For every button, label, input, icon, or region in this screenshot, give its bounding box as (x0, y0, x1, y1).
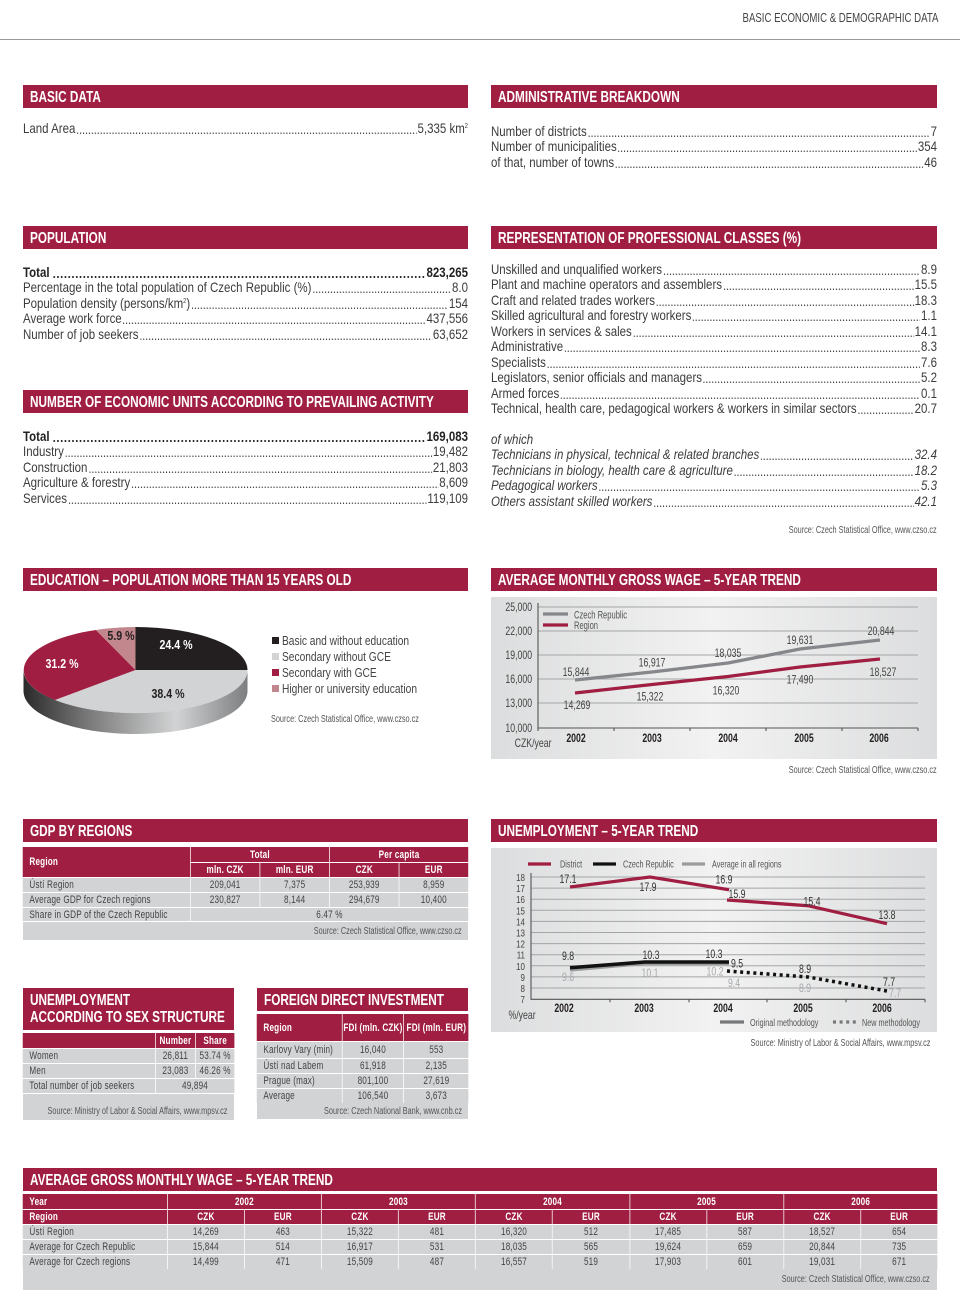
line chart: unemployment trend: 9.4 (728, 978, 740, 990)
line chart: unemployment trend: 9.6 (562, 972, 574, 984)
pie chart: education: 5.9 % (107, 629, 135, 643)
heading: basic data: BASIC DATA (30, 89, 100, 106)
text block: professional classes: Specialists (491, 354, 546, 370)
table: gdp by regions: 8,959 (423, 879, 444, 891)
line chart: wage trend: 14,269 (564, 700, 591, 712)
heading: education (23, 568, 468, 591)
text block: population: Total (23, 264, 50, 280)
line chart: wage trend: Czech Republic (574, 609, 627, 622)
line chart: unemployment trend: 17 (516, 883, 525, 894)
source: gdp by regions: Source: Czech Statistical Office, www.czso.cz (314, 926, 462, 937)
line chart: unemployment trend: Original methodology (750, 1017, 819, 1028)
table: foreign direct investment: Ústí nad Labem (263, 1060, 323, 1072)
table: unemployment by sex: Women (29, 1050, 58, 1062)
table: gross monthly wage: 671 (892, 1256, 906, 1268)
line chart: unemployment trend: 2003 (634, 1003, 654, 1015)
table: gross monthly wage: EUR (890, 1211, 908, 1223)
table: gross monthly wage: CZK (659, 1211, 677, 1223)
table: gross monthly wage: 16,320 (501, 1226, 527, 1238)
text block: professional classes: 8.9 (921, 261, 937, 277)
heading: gross monthly wage (23, 1168, 937, 1191)
source: wage trend: Source: Czech Statistical Office, www.czso.cz (789, 765, 937, 776)
heading: professional classes: REPRESENTATION OF PROFESSIONAL CLASSES (%) (498, 230, 801, 247)
line chart: unemployment trend: 7 (521, 994, 525, 1005)
table: unemployment by sex: Total number of job seekers (29, 1080, 134, 1092)
table: unemployment by sex: 26,811 (163, 1050, 188, 1062)
line chart: wage trend: 13,000 (505, 698, 532, 710)
text block: administrative breakdown (491, 123, 937, 170)
text block: of which: 42.1 (915, 493, 937, 509)
line chart: unemployment trend: 2004 (713, 1003, 733, 1015)
text block: population: 63,652 (433, 326, 468, 342)
line chart: wage trend: 16,000 (505, 674, 532, 686)
table: gross monthly wage: Average for Czech regions (29, 1256, 130, 1268)
heading: gdp by regions: GDP BY REGIONS (30, 823, 132, 840)
table: foreign direct investment: 2,135 (426, 1060, 447, 1072)
line chart: unemployment trend: 10.2 (707, 966, 724, 979)
table: gdp by regions: 7,375 (284, 879, 305, 891)
text block: of which: 5.3 (921, 477, 937, 493)
table: foreign direct investment: FDI (mln. CZK) (343, 1022, 403, 1034)
text block: administrative breakdown: Number of municipalities (491, 138, 617, 154)
table: gross monthly wage: 16,917 (347, 1241, 373, 1253)
text block: professional classes: 8.3 (921, 338, 937, 354)
table: gross monthly wage: 587 (738, 1226, 752, 1238)
table: gross monthly wage: 487 (430, 1256, 444, 1268)
table: foreign direct investment: Karlovy Vary (min) (263, 1044, 333, 1056)
table: foreign direct investment (256, 1014, 468, 1103)
legend: education: Secondary without GCE (282, 649, 391, 664)
heading: unemployment trend: UNEMPLOYMENT – 5-YEAR TREND (498, 823, 698, 840)
text block: population: 8.0 (452, 279, 468, 295)
text block: professional classes: Armed forces (491, 385, 559, 401)
text block: professional classes: 0.1 (921, 385, 937, 401)
text block: population: Percentage in the total population of Czech Republic (%) (23, 279, 311, 295)
table: foreign direct investment: 3,673 (426, 1090, 447, 1102)
line chart: unemployment trend: 10.1 (642, 968, 659, 980)
line chart: wage trend: 2005 (794, 733, 814, 745)
table: gross monthly wage: 481 (430, 1226, 444, 1238)
source: education: Source: Czech Statistical Office, www.czso.cz (271, 714, 419, 725)
table: gross monthly wage: 2004 (543, 1196, 562, 1208)
table: gdp by regions: EUR (425, 864, 443, 876)
line chart: unemployment trend: 10.3 (643, 950, 660, 962)
page header: BASIC ECONOMIC & DEMOGRAPHIC DATA (742, 11, 938, 25)
table: gdp by regions: 253,939 (349, 879, 380, 891)
heading: professional classes (491, 226, 937, 249)
table: foreign direct investment: 27,619 (423, 1075, 449, 1087)
table: gross monthly wage: 735 (892, 1241, 906, 1253)
table: gdp by regions (22, 847, 468, 921)
heading: population: POPULATION (30, 230, 106, 247)
table: gdp by regions: Per capita (379, 848, 419, 860)
table: gdp by regions: 10,400 (421, 894, 447, 906)
table: unemployment by sex: 49,894 (182, 1080, 208, 1092)
line chart: unemployment trend: 16 (516, 894, 525, 905)
text block: population: Average work force (23, 310, 122, 326)
line chart: unemployment trend (491, 848, 937, 1032)
table: gross monthly wage: 565 (584, 1241, 598, 1253)
text block: basic data (23, 120, 468, 136)
line chart: wage trend (491, 597, 937, 759)
line chart: unemployment trend: 2006 (872, 1003, 892, 1015)
heading: gdp by regions (23, 819, 468, 842)
text block: professional classes: Skilled agricultural and forestry workers (491, 307, 691, 323)
line chart: unemployment trend: 17.9 (640, 882, 657, 894)
text block: of which: Technicians in physical, technical & related branches (491, 446, 759, 462)
line chart: unemployment trend: 18 (516, 872, 525, 883)
table: gross monthly wage: Year (29, 1196, 47, 1208)
table: unemployment by sex: Men (29, 1065, 46, 1077)
heading: unemployment by sex: UNEMPLOYMENT (30, 992, 130, 1009)
text block: professional classes: Plant and machine operators and assemblers (491, 276, 722, 292)
source: gross monthly wage (23, 1269, 937, 1290)
text block: of which: Technicians in biology, health care & agriculture (491, 462, 733, 478)
line chart: unemployment trend: 7.7 (883, 977, 895, 989)
legend: education: Basic and without education (282, 633, 409, 648)
table: gross monthly wage: 531 (430, 1241, 444, 1253)
heading: foreign direct investment (257, 988, 468, 1011)
text block: economic units: 19,482 (433, 443, 468, 459)
table: foreign direct investment: 16,040 (360, 1044, 386, 1056)
text block: economic units: 21,803 (433, 459, 468, 475)
line chart: unemployment trend: 8.9 (799, 983, 811, 995)
table: gdp by regions: mln. CZK (207, 864, 244, 876)
text block: administrative breakdown: of that, number of towns (491, 154, 614, 170)
text block: professional classes: 20.7 (915, 400, 937, 416)
line chart: unemployment trend: 2005 (793, 1003, 813, 1015)
heading: population (23, 226, 468, 249)
table: foreign direct investment: 61,918 (360, 1060, 386, 1072)
text block: basic data: Land Area (23, 120, 75, 136)
text block: of which: 32.4 (915, 446, 937, 462)
heading: economic units (23, 390, 468, 413)
table: gross monthly wage: 15,844 (193, 1241, 219, 1253)
table: unemployment by sex: Share (203, 1034, 227, 1046)
line chart: unemployment trend: 17.1 (560, 874, 577, 886)
text block: population: 823,265 (426, 264, 468, 280)
table: foreign direct investment: 801,100 (358, 1075, 388, 1087)
table: gross monthly wage: 14,499 (193, 1256, 219, 1268)
heading: foreign direct investment: FOREIGN DIRECT INVESTMENT (264, 992, 443, 1009)
text block: professional classes: Technical, health care, pedagogical workers & workers in similar sectors (491, 400, 857, 416)
line chart: wage trend: 16,320 (713, 685, 740, 698)
line chart: unemployment trend: New methodology (862, 1017, 920, 1028)
line chart: unemployment trend: 7.7 (889, 988, 901, 1000)
line chart: unemployment trend: 13.8 (879, 910, 896, 922)
line chart: wage trend: 2003 (642, 733, 662, 745)
line chart: unemployment trend: 11 (517, 949, 525, 961)
line chart: unemployment trend: 9.5 (731, 958, 743, 971)
line chart: unemployment trend: 12 (516, 938, 525, 950)
table: gross monthly wage: 654 (892, 1226, 906, 1238)
text block: population: 154 (449, 295, 468, 311)
pie chart: education (24, 627, 248, 734)
text block: economic units: 119,109 (427, 490, 468, 506)
line chart: wage trend: 16,917 (639, 657, 666, 670)
line chart: unemployment trend: %/year (508, 1010, 536, 1022)
table: gdp by regions: Ústí Region (29, 879, 74, 891)
text block: population: Number of job seekers (23, 326, 138, 342)
table: foreign direct investment: Prague (max) (263, 1075, 315, 1087)
pie chart: education: 24.4 % (159, 638, 193, 652)
table: gross monthly wage: 2002 (235, 1196, 254, 1208)
heading: wage trend: AVERAGE MONTHLY GROSS WAGE – 5-YEAR TREND (498, 572, 800, 589)
line chart: wage trend: 15,844 (563, 667, 590, 679)
table: gross monthly wage: 15,509 (347, 1256, 373, 1268)
line chart: wage trend: 17,490 (787, 674, 814, 687)
table: gross monthly wage: EUR (582, 1211, 600, 1223)
line chart: wage trend: 19,000 (505, 650, 532, 662)
table: gross monthly wage: 659 (738, 1241, 752, 1253)
table: gross monthly wage: CZK (813, 1211, 831, 1223)
table: foreign direct investment: Region (263, 1022, 292, 1034)
heading: unemployment by sex (23, 988, 234, 1030)
line chart: wage trend: 19,631 (787, 635, 814, 647)
table: gross monthly wage: CZK (505, 1211, 523, 1223)
line chart: unemployment trend: 14 (516, 916, 525, 928)
page header (0, 0, 960, 40)
source: unemployment trend: Source: Ministry of Labor & Social Affairs, www.mpsv.cz (750, 1038, 930, 1049)
table: gross monthly wage: 2006 (851, 1196, 870, 1208)
table: gross monthly wage: 2005 (697, 1196, 716, 1208)
table: gdp by regions: Region (29, 856, 58, 868)
table: unemployment by sex (22, 1033, 234, 1093)
table: foreign direct investment: 553 (429, 1044, 443, 1056)
text block: professional classes: 5.2 (921, 369, 937, 385)
table: gdp by regions: Average GDP for Czech regions (29, 894, 151, 906)
table: gross monthly wage: 514 (276, 1241, 290, 1253)
table: gross monthly wage: 18,035 (501, 1241, 527, 1253)
text block: basic data: 5,335 km2 (418, 120, 468, 136)
text block: professional classes: 7.6 (921, 354, 937, 370)
table: gdp by regions: 8,144 (284, 894, 305, 906)
table: unemployment by sex: 46.26 % (200, 1065, 231, 1077)
table: unemployment by sex: 23,083 (162, 1065, 188, 1077)
table: gross monthly wage: CZK (351, 1211, 369, 1223)
line chart: unemployment trend: 8.9 (799, 964, 811, 976)
table: gross monthly wage (22, 1194, 938, 1269)
table: gross monthly wage: EUR (274, 1211, 292, 1223)
text block: professional classes: 1.1 (921, 307, 937, 323)
line chart: wage trend: 22,000 (505, 626, 532, 638)
table: gdp by regions: 209,041 (210, 879, 241, 891)
line chart: unemployment trend: 16.9 (716, 874, 733, 887)
line chart: wage trend: 20,844 (868, 626, 895, 638)
heading: basic data (23, 85, 468, 108)
line chart: wage trend: 2006 (869, 733, 889, 745)
heading: unemployment trend (491, 819, 937, 842)
text block: population (23, 264, 468, 342)
text block: of which (491, 431, 937, 509)
text block: economic units (23, 428, 468, 506)
text block: of which: Pedagogical workers (491, 477, 598, 493)
heading: administrative breakdown: ADMINISTRATIVE BREAKDOWN (498, 89, 679, 106)
text block: professional classes: Craft and related trades workers (491, 292, 655, 308)
text block: professional classes: 15.5 (915, 276, 937, 292)
table: gross monthly wage: 471 (276, 1256, 290, 1268)
line chart: wage trend: 2002 (566, 733, 586, 745)
table: gross monthly wage: 17,903 (655, 1256, 681, 1268)
table: gdp by regions: CZK (356, 864, 373, 876)
table: foreign direct investment: 106,540 (358, 1090, 388, 1102)
text block: economic units: 8,609 (439, 474, 468, 490)
heading: administrative breakdown (491, 85, 937, 108)
text block: professional classes: Workers in services & sales (491, 323, 632, 339)
text block: population: 437,556 (426, 310, 468, 326)
line chart: wage trend: 15,322 (637, 691, 664, 704)
table: gross monthly wage: 16,557 (501, 1256, 527, 1268)
source: foreign direct investment (257, 1103, 468, 1119)
table: gross monthly wage: CZK (197, 1211, 215, 1223)
source: professional classes: Source: Czech Statistical Office, www.czso.cz (789, 525, 937, 536)
heading: unemployment by sex: ACCORDING TO SEX STRUCTURE (30, 1009, 224, 1026)
text block: economic units: Services (23, 490, 67, 506)
table: foreign direct investment: Average (263, 1090, 295, 1102)
heading: wage trend (491, 568, 937, 591)
source: unemployment by sex (23, 1094, 234, 1120)
line chart: wage trend: 2004 (718, 733, 738, 745)
table: gross monthly wage: EUR (736, 1211, 754, 1223)
text block: professional classes: Administrative (491, 338, 563, 354)
pie chart: education: 31.2 % (45, 657, 79, 671)
table: unemployment by sex: Number (159, 1034, 191, 1046)
line chart: unemployment trend: 9 (521, 972, 525, 983)
source: gross monthly wage: Source: Czech Statistical Office, www.czso.cz (782, 1274, 930, 1285)
line chart: wage trend: 18,035 (715, 648, 742, 660)
line chart: wage trend: 10,000 (505, 723, 532, 735)
line chart: unemployment trend: Czech Republic (623, 858, 674, 870)
table: gross monthly wage: 18,527 (809, 1226, 835, 1238)
source: gdp by regions (23, 922, 468, 940)
text block: of which: 18.2 (915, 462, 937, 478)
table: gdp by regions: mln. EUR (276, 864, 314, 876)
text block: economic units: Construction (23, 459, 87, 475)
text block: administrative breakdown: Number of districts (491, 123, 587, 139)
legend: education: Secondary with GCE (282, 665, 377, 680)
text block: economic units: Industry (23, 443, 64, 459)
heading: education: EDUCATION – POPULATION MORE THAN 15 YEARS OLD (30, 572, 351, 589)
line chart: unemployment trend: 15 (516, 905, 525, 917)
line chart: unemployment trend: 10.3 (706, 949, 723, 961)
table: gross monthly wage: 463 (276, 1226, 290, 1238)
table: foreign direct investment: FDI (mln. EUR) (407, 1022, 466, 1034)
legend: education: Higher or university education (282, 681, 417, 696)
text block: administrative breakdown: 46 (924, 154, 937, 170)
table: gross monthly wage: 17,485 (655, 1226, 681, 1238)
table: gross monthly wage: 15,322 (347, 1226, 373, 1238)
line chart: wage trend: Region (574, 620, 598, 632)
table: gross monthly wage: 601 (738, 1256, 752, 1268)
table: gdp by regions: 294,679 (349, 894, 380, 906)
text block: administrative breakdown: 354 (918, 138, 937, 154)
table: gdp by regions: 230,827 (210, 894, 241, 906)
line chart: wage trend: 25,000 (505, 602, 532, 614)
source: unemployment by sex: Source: Ministry of Labor & Social Affairs, www.mpsv.cz (47, 1106, 227, 1117)
table: gross monthly wage: Region (29, 1211, 58, 1223)
table: gross monthly wage: 19,624 (655, 1241, 681, 1253)
pie chart: education: 38.4 % (151, 687, 185, 701)
text block: professional classes: 14.1 (915, 323, 937, 339)
line chart: unemployment trend: 13 (516, 927, 525, 939)
table: gdp by regions: 6.47 % (316, 908, 343, 920)
source: foreign direct investment: Source: Czech National Bank, www.cnb.cz (324, 1106, 462, 1117)
text block: professional classes: Legislators, senior officials and managers (491, 369, 702, 385)
legend: education (272, 633, 417, 696)
text block: economic units: Agriculture & forestry (23, 474, 130, 490)
line chart: unemployment trend: 2002 (554, 1003, 574, 1015)
table: gross monthly wage: 19,031 (809, 1256, 835, 1268)
table: gross monthly wage: Average for Czech Republic (29, 1241, 135, 1253)
table: gross monthly wage: 20,844 (809, 1241, 835, 1253)
table: gross monthly wage: 2003 (389, 1196, 408, 1208)
heading: gross monthly wage: AVERAGE GROSS MONTHLY WAGE – 5-YEAR TREND (30, 1172, 332, 1189)
text block: economic units: 169,083 (426, 428, 468, 444)
line chart: unemployment trend: 15.4 (804, 896, 821, 909)
line chart: wage trend: 18,527 (870, 667, 897, 679)
line chart: unemployment trend: 15.9 (729, 889, 746, 901)
text block: professional classes: Unskilled and unqualified workers (491, 261, 662, 277)
table: unemployment by sex: 53.74 % (200, 1050, 231, 1062)
text block: professional classes (491, 261, 937, 416)
text block: population: Population density (persons/km2) (23, 295, 190, 311)
line chart: unemployment trend: 8 (521, 983, 525, 994)
text block: administrative breakdown: 7 (931, 123, 937, 139)
text block: economic units: Total (23, 428, 50, 444)
text block: of which: Others assistant skilled workers (491, 493, 652, 509)
table: gross monthly wage: Ústí Region (29, 1226, 74, 1238)
line chart: unemployment trend: Average in all regions (712, 858, 782, 870)
line chart: unemployment trend: 9.8 (562, 951, 574, 963)
table: gross monthly wage: 512 (584, 1226, 598, 1238)
table: gross monthly wage: EUR (428, 1211, 446, 1223)
table: gross monthly wage: 14,269 (193, 1226, 219, 1238)
table: gdp by regions: Total (250, 848, 270, 860)
text block: professional classes: 18.3 (915, 292, 937, 308)
heading: economic units: NUMBER OF ECONOMIC UNITS ACCORDING TO PREVAILING ACTIVITY (30, 394, 433, 411)
line chart: unemployment trend: 10 (516, 961, 525, 972)
line chart: wage trend: CZK/year (515, 738, 552, 750)
table: gross monthly wage: 519 (584, 1256, 598, 1268)
text block: of which: of which (491, 431, 533, 447)
table: gdp by regions: Share in GDP of the Czech Republic (29, 908, 168, 920)
line chart: unemployment trend: District (560, 858, 583, 870)
